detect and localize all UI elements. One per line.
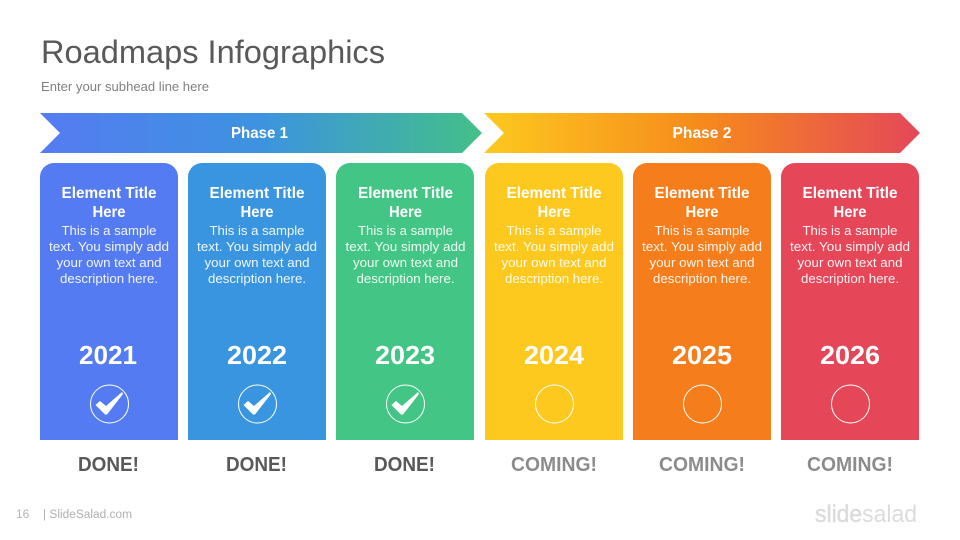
- panel: 2023: [336, 163, 474, 440]
- panel: 2024: text. You simply add: [494, 239, 614, 254]
- panel: 2026: This is a sample: [802, 223, 898, 238]
- logo: slidesalad: [815, 501, 917, 528]
- title: Roadmaps Infographics: [41, 34, 385, 70]
- panel: 2021: 2021: [79, 340, 137, 370]
- panel: 2023: This is a sample: [358, 223, 453, 238]
- status: 2021: DONE!: [78, 454, 139, 476]
- panel: 2021: [40, 163, 178, 440]
- panel: 2025: your own text and: [650, 255, 754, 270]
- arrow: Phase 2: Phase 2: [672, 125, 732, 142]
- panel: 2023: text. You simply add: [346, 239, 466, 254]
- panel: 2022: 2022: [227, 340, 287, 370]
- arrow: Phase 1: [40, 113, 482, 153]
- panel: 2024: your own text and: [502, 255, 606, 270]
- panel: 2025: text. You simply add: [642, 239, 762, 254]
- panel: 2024: [485, 163, 623, 440]
- panel: 2023: Here: [389, 204, 422, 221]
- status: 2026: COMING!: [807, 454, 893, 476]
- page number: 16: [16, 507, 30, 521]
- status: 2025: COMING!: [659, 454, 745, 476]
- panel: 2026: text. You simply add: [790, 239, 910, 254]
- panel: 2024: Here: [538, 204, 571, 221]
- panel: 2021: Here: [92, 204, 126, 221]
- panel: 2023: your own text and: [353, 255, 458, 270]
- panel: 2026: your own text and: [798, 255, 902, 270]
- panel: 2024: 2024: [524, 340, 585, 370]
- panel: 2022: Here: [240, 204, 274, 221]
- panel: 2021: Element Title: [62, 185, 157, 202]
- panel: 2021: your own text and: [56, 255, 162, 270]
- panel: 2021: text. You simply add: [49, 239, 169, 254]
- panel: 2023: Element Title: [358, 185, 453, 202]
- panel: 2024: This is a sample: [506, 223, 602, 238]
- panel: 2022: [188, 163, 326, 440]
- panel: 2026: Element Title: [802, 185, 898, 202]
- panel: 2024: description here.: [505, 271, 603, 286]
- panel: 2025: 2025: [672, 340, 732, 370]
- panel: 2022: text. You simply add: [197, 239, 317, 254]
- panel: 2021: This is a sample: [62, 223, 156, 238]
- panel: 2022: description here.: [208, 271, 306, 286]
- status: 2024: COMING!: [511, 454, 597, 476]
- arrow: Phase 2: [484, 113, 920, 153]
- arrow: Phase 1: Phase 1: [231, 125, 288, 142]
- panel: 2023: description here.: [356, 271, 454, 286]
- footer source: | SlideSalad.com: [43, 509, 132, 521]
- panel: 2022: your own text and: [204, 255, 310, 270]
- panel: 2021: description here.: [60, 271, 158, 286]
- status: 2023: DONE!: [374, 454, 435, 476]
- panel: 2025: [633, 163, 771, 440]
- panel: 2025: Element Title: [654, 185, 750, 202]
- panel: 2024: Element Title: [506, 185, 602, 202]
- panel: 2026: 2026: [820, 340, 880, 370]
- panel: 2025: Here: [686, 204, 719, 221]
- panel: 2026: Here: [834, 204, 867, 221]
- panel: 2022: This is a sample: [210, 223, 304, 238]
- panel: 2026: description here.: [801, 271, 899, 286]
- subhead: Enter your subhead line here: [41, 80, 209, 94]
- panel: 2026: [781, 163, 919, 440]
- panel: 2025: This is a sample: [654, 223, 750, 238]
- panel: 2023: 2023: [375, 340, 435, 370]
- status: 2022: DONE!: [226, 454, 287, 476]
- panel: 2022: Element Title: [210, 185, 305, 202]
- panel: 2025: description here.: [653, 271, 751, 286]
